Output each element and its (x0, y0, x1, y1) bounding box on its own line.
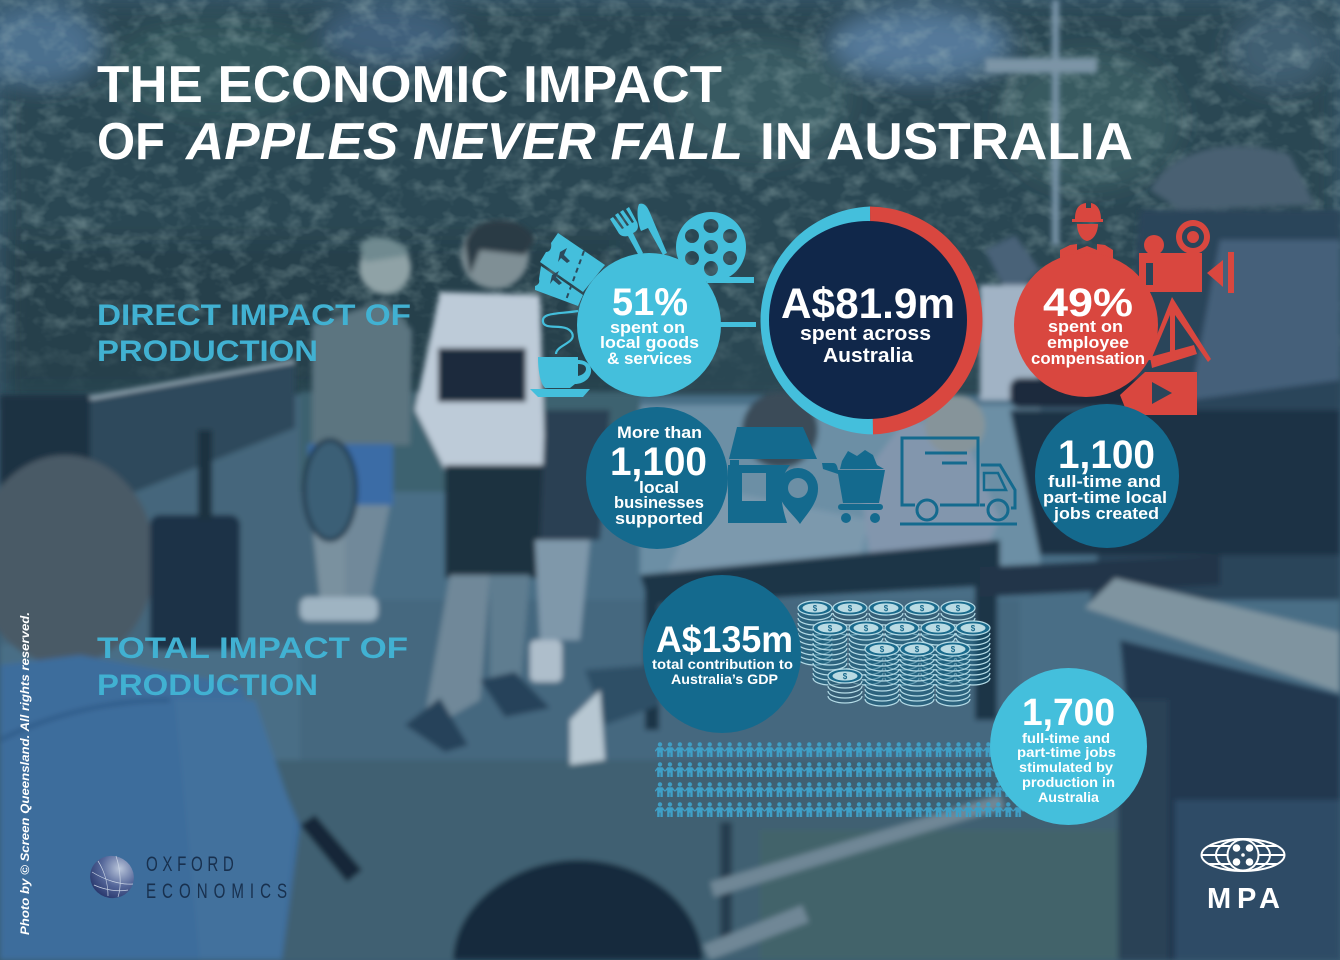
circle: 1,700 jobs stimulated: production in (1022, 774, 1115, 790)
heading: total impact of production (97, 632, 408, 702)
circle: 51% spent on local goods and services: & services (607, 350, 692, 368)
circle: 1,700 jobs stimulated: 1,700 (1022, 692, 1115, 734)
icon: construction worker (1060, 203, 1113, 260)
circle: 1,100 full-time and part-time local jobs created: full-time and (1048, 473, 1161, 491)
logo: MPA: MPA (1207, 883, 1280, 915)
donut: A$81.9m spent across Australia (761, 206, 982, 434)
icon: coffee cup with steam (530, 311, 591, 397)
circle: 49% spent on employee compensation: employee (1047, 334, 1129, 352)
logo: Oxford Economics: OXFORD (146, 851, 234, 876)
icon: coin stacks (798, 601, 990, 706)
circle: 49% spent on employee compensation: 49% (1043, 281, 1133, 325)
circle: 51% spent on local goods and services: local goods (600, 334, 699, 352)
logo: Oxford Economics: ECONOMICS (146, 878, 287, 903)
pictogram: rows of people (655, 742, 1025, 818)
heading: total impact of production: TOTAL IMPACT OF (97, 632, 408, 665)
circle: more than 1,100 local businesses supported: supported (615, 510, 703, 528)
circle: more than 1,100 local businesses supported (586, 407, 728, 549)
title: OF (97, 113, 165, 171)
circle: 1,100 full-time and part-time local jobs created: 1,100 (1058, 433, 1155, 477)
circle: more than 1,100 local businesses supported: 1,100 (610, 440, 707, 484)
circle: A$135m total contribution to Australia's GDP: total contribution to (652, 656, 793, 672)
circle: 49% spent on employee compensation: spent on (1048, 318, 1123, 336)
circle: 1,700 jobs stimulated (990, 668, 1147, 825)
circle: more than 1,100 local businesses supported: local (639, 479, 679, 497)
circle: 51% spent on local goods and services: spent on (610, 319, 685, 337)
icon: delivery truck (900, 438, 1017, 524)
circle: A$135m total contribution to Australia's GDP: A$135m (656, 619, 793, 660)
title: IN AUSTRALIA (760, 113, 1133, 171)
icon: movie camera (1139, 220, 1234, 362)
circle: 1,700 jobs stimulated: part-time jobs (1017, 744, 1116, 760)
icon: film reel (676, 212, 754, 283)
title: APPLES NEVER FALL (184, 113, 743, 171)
logo: Oxford Economics (84, 850, 287, 904)
donut: A$81.9m spent across Australia: Australia (823, 345, 914, 367)
icon: coin stacks: $$$$$ (828, 624, 976, 633)
heading: direct impact of production (97, 299, 411, 368)
heading: direct impact of production: DIRECT IMPACT OF (97, 299, 411, 332)
donut: A$81.9m spent across Australia: spent across (800, 323, 931, 345)
icon: shopping cart (822, 450, 885, 523)
icon: tickets (535, 233, 605, 306)
heading: total impact of production: PRODUCTION (97, 669, 318, 702)
circle: 1,100 full-time and part-time local jobs created: jobs created (1053, 505, 1159, 523)
circle: 49% spent on employee compensation (1014, 253, 1158, 397)
circle: 1,700 jobs stimulated: full-time and (1022, 730, 1110, 746)
photo credit: Photo by © Screen Queensland. All rights reserved. (18, 612, 32, 935)
heading: direct impact of production: PRODUCTION (97, 335, 318, 368)
icon: coin stacks: $$$$ (843, 645, 956, 681)
icon: coin stacks: $$$$$ (813, 604, 961, 613)
donut: A$81.9m spent across Australia: A$81.9m (781, 280, 955, 328)
icon: shop with location pin (728, 427, 818, 524)
circle: 49% spent on employee compensation: compensation (1031, 350, 1145, 368)
circle: 1,700 jobs stimulated: stimulated by (1019, 759, 1113, 775)
circle: 51% spent on local goods and services (577, 253, 721, 397)
title (97, 56, 1133, 171)
icon: clapperboard with play button (1120, 345, 1197, 415)
circle: A$135m total contribution to Australia's GDP: Australia’s GDP (671, 671, 778, 687)
icon: cutlery (610, 204, 667, 256)
title: THE ECONOMIC IMPACT (97, 56, 722, 114)
circle: 1,700 jobs stimulated: Australia (1038, 789, 1099, 805)
circle: 1,100 full-time and part-time local jobs created (1035, 404, 1179, 548)
circle: 1,100 full-time and part-time local jobs created: part-time local (1043, 489, 1167, 507)
circle: more than 1,100 local businesses supported: More than (617, 424, 702, 442)
circle: 51% spent on local goods and services: 51% (612, 281, 688, 324)
logo: MPA (1202, 839, 1284, 915)
connector line (718, 322, 756, 327)
circle: more than 1,100 local businesses supported: businesses (614, 494, 704, 512)
circle: A$135m total contribution to Australia's GDP (643, 575, 801, 733)
